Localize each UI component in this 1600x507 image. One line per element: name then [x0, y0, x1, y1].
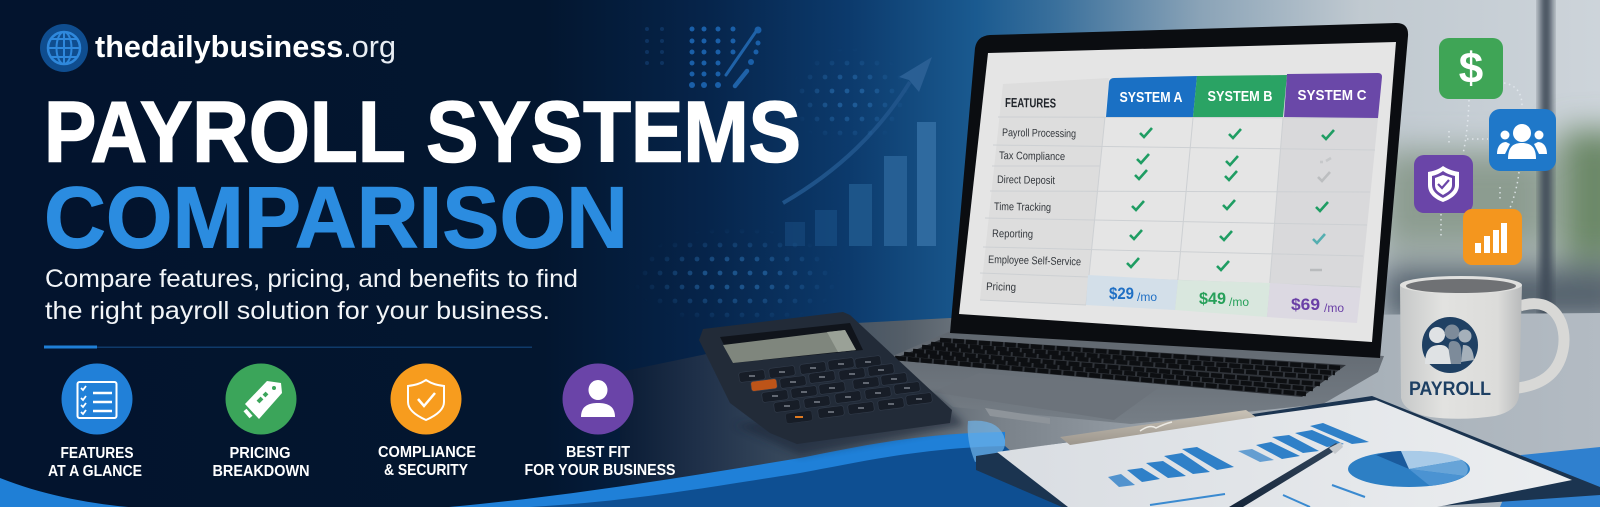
logo: [40, 24, 396, 72]
icon: people: [1489, 109, 1556, 171]
pricing row: system b: [1175, 280, 1270, 317]
title: [44, 84, 801, 266]
icon: globe: [40, 24, 88, 72]
pricing row: system c: [1267, 283, 1361, 323]
pricing row: system a: $29: [1109, 284, 1134, 303]
calculator: [699, 312, 965, 455]
calculator keys: [738, 355, 933, 424]
table row labels: Payroll Processing: [1002, 127, 1076, 140]
label: [212, 445, 310, 480]
title: PAYROLL SYSTEMS: [44, 84, 801, 180]
table left column shading: [980, 78, 1109, 305]
subtitle: Compare features, pricing, and benefits to find: [45, 265, 578, 293]
table row labels: Tax Compliance: [999, 150, 1065, 163]
label: BREAKDOWN: [212, 463, 310, 480]
pricing row: system a: /mo: [1137, 290, 1157, 304]
icon: orange bar chart: [1463, 209, 1522, 265]
icon: shield: [390, 364, 462, 434]
table header: features: FEATURES: [1005, 95, 1056, 111]
pricing row: system b: /mo: [1229, 295, 1249, 309]
laptop screen: [959, 42, 1396, 342]
label: PRICING: [230, 445, 290, 462]
calculator display: [720, 323, 863, 363]
icon: checklist: [62, 364, 132, 434]
calculator orange key: [785, 410, 813, 424]
table row labels: Employee Self-Service: [988, 254, 1081, 268]
table row labels: Pricing: [986, 281, 1016, 294]
bar chart: [1108, 423, 1369, 487]
table header: system c: SYSTEM C: [1298, 87, 1367, 104]
subtitle: [45, 265, 578, 325]
paper lower chart marks: [1150, 485, 1365, 507]
label: & SECURITY: [384, 462, 468, 479]
mug logo: [1422, 317, 1478, 373]
icon: shield check: [1414, 155, 1473, 213]
label: FEATURES: [60, 445, 134, 462]
feature: compliance and security: [378, 364, 476, 479]
icon: price tag: [226, 364, 296, 434]
desk surface: [620, 313, 1600, 507]
label: [524, 444, 676, 479]
feature: pricing breakdown: [212, 364, 310, 480]
feature: features at a glance: [48, 364, 142, 480]
coffee mug: [1400, 276, 1564, 419]
table header: system a: [1106, 76, 1197, 117]
calculator orange glyph: [795, 416, 803, 418]
laptop base and keyboard: [888, 330, 1384, 424]
label: AT A GLANCE: [48, 463, 142, 480]
icon: dollar: [1439, 38, 1503, 99]
label: [48, 445, 142, 480]
table row labels: Reporting: [992, 228, 1033, 241]
pricing row: system a: [1086, 275, 1178, 310]
table row labels: Direct Deposit: [997, 174, 1055, 187]
divider: [44, 346, 532, 348]
pricing row: system c: $69: [1291, 295, 1320, 314]
pricing row: system c: /mo: [1324, 301, 1344, 315]
label: COMPLIANCE: [378, 444, 476, 461]
background: dot clusters: [630, 26, 920, 330]
laptop: [888, 23, 1408, 424]
subtitle: the right payroll solution for your business.: [45, 297, 550, 325]
pen: [1229, 442, 1343, 507]
label: FOR YOUR BUSINESS: [524, 462, 676, 479]
mug handle: [1518, 304, 1564, 388]
mug text: PAYROLL: [1409, 379, 1491, 400]
calculator key glyph ticks: [749, 362, 922, 412]
paper: [997, 400, 1572, 507]
background: chart bars and growth arrow: [783, 57, 936, 246]
comparison table column shading: [1270, 117, 1378, 288]
table row labels: [986, 127, 1081, 294]
mug body: [1400, 285, 1522, 419]
feature: best fit: [524, 364, 676, 479]
logo text: thedailybusiness.org: [95, 29, 396, 64]
background: blurred office window: [1380, 0, 1600, 325]
table header: system b: SYSTEM B: [1208, 88, 1273, 105]
table row labels: Time Tracking: [994, 201, 1051, 214]
pricing row: system b: $49: [1199, 289, 1226, 308]
table header: system c: [1284, 73, 1382, 118]
icon: dollar: $: [1459, 44, 1483, 93]
table header: system a: SYSTEM A: [1120, 89, 1183, 106]
label: BEST FIT: [566, 444, 630, 461]
blue wave: [0, 421, 1600, 507]
icon: person: [562, 364, 634, 434]
table grid lines: [980, 117, 1378, 317]
label: [378, 444, 476, 479]
table check marks: [1127, 128, 1334, 270]
table header: system b: [1193, 75, 1287, 117]
floating icon connectors: [1441, 83, 1522, 238]
title: COMPARISON: [44, 170, 628, 266]
pie chart: [1348, 451, 1470, 487]
mug rim: [1400, 276, 1522, 294]
clipboard: [976, 396, 1600, 507]
clip: [1060, 410, 1256, 445]
laptop lid: [950, 23, 1408, 358]
